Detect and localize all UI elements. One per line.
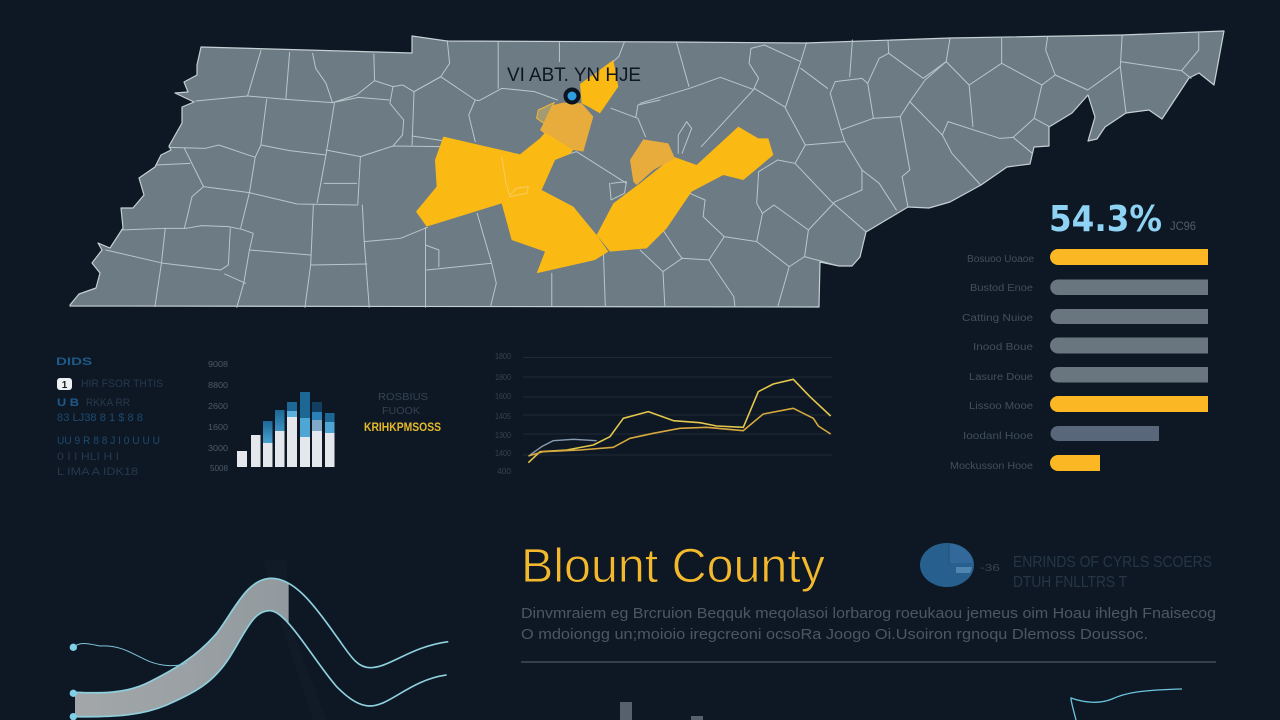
state outline xyxy=(70,31,1224,307)
legend line 2: U B xyxy=(57,397,79,409)
map pin xyxy=(564,88,580,104)
legend line 5: UU 9 R 8 8 J I 0 U U U xyxy=(57,435,160,447)
bar row 3 xyxy=(962,309,1208,324)
top fade over north tip xyxy=(578,60,600,78)
legend line 3: RKKA RR xyxy=(86,397,130,409)
y axis labels: 3000 xyxy=(208,444,229,453)
big stat: 54.3% xyxy=(1049,199,1162,240)
map: state with counties xyxy=(70,31,1224,307)
county: light amber east xyxy=(630,139,675,185)
heading: Blount County: Blount County xyxy=(521,540,825,593)
ribbon fill xyxy=(75,579,289,716)
map label: VI ABT. YN HJE xyxy=(507,65,641,86)
series grey xyxy=(530,439,597,455)
y axis labels xyxy=(495,351,511,476)
divider xyxy=(521,661,1216,663)
bar row 2: Bustod Enoe xyxy=(970,283,1033,294)
pie chart: -36 xyxy=(980,563,1001,574)
paragraph line 2: O mdoiongg un;moioio iregcreoni ocsoRa Joogo Oi.Usoiron rgnoqu Dlemoss Doussoc. xyxy=(521,626,1148,643)
y axis labels xyxy=(208,360,229,473)
lower curve xyxy=(75,611,447,717)
y axis labels: 5008 xyxy=(210,464,229,473)
bar row 7 xyxy=(963,426,1159,442)
pie caption xyxy=(1013,554,1212,591)
bottom right sparkline xyxy=(1071,689,1182,720)
stat unit: JC96 xyxy=(1170,219,1196,233)
caption line 1: ENRINDS OF CYRLS SCOERS xyxy=(1013,554,1212,571)
legend line 1: HIR FSOR THTIS xyxy=(81,378,163,390)
y axis labels: 9008 xyxy=(208,360,229,369)
bar row 5 xyxy=(969,367,1208,383)
legend badge: 1 xyxy=(62,380,68,391)
county boundary details xyxy=(502,157,528,197)
y axis labels: 1400 xyxy=(495,448,511,458)
county borders east xyxy=(640,33,1199,307)
highlighted counties xyxy=(416,60,773,273)
bar row 3: Catting Nuioe xyxy=(962,313,1034,324)
paragraph line 1: Dinvmraiem eg Brcruion Beqquk meqolasoi lorbarog roeukaou jemeus oim Hoau ihlegh Fnaisecog xyxy=(521,605,1216,622)
grid lines xyxy=(523,358,832,455)
bar row 4 xyxy=(973,338,1208,354)
y axis labels: 1405 xyxy=(495,411,511,421)
bar row 8: Mockusson Hooe xyxy=(950,461,1033,472)
legend line 4: 83 LJ38 8 1 $ 8 8 xyxy=(57,412,143,424)
bar row 1: Bosuoo Uoaoe xyxy=(967,254,1034,265)
bar row 6: Lissoo Mooe xyxy=(969,401,1033,412)
bar chart side note xyxy=(364,392,441,434)
bar row 8 xyxy=(950,455,1100,472)
bottom stub bars xyxy=(620,702,703,720)
pie chart xyxy=(920,543,1001,587)
series lower xyxy=(528,408,831,456)
legend heading: DIDS xyxy=(56,356,92,368)
bar row 2 xyxy=(970,280,1208,295)
legend line 6: 0 I I HLI H I xyxy=(57,451,119,463)
county: light amber north xyxy=(540,103,593,152)
bar row 4: Inood Boue xyxy=(973,342,1033,353)
y axis labels: 1300 xyxy=(495,430,511,440)
description paragraph xyxy=(521,605,1216,643)
y axis labels: 1800 xyxy=(495,351,511,361)
note line 2: FUOOK xyxy=(382,406,420,417)
note highlight: KRIHKPMSOSS xyxy=(364,420,441,434)
county group: east xyxy=(597,127,773,252)
y axis labels: 8800 xyxy=(208,381,229,390)
line chart xyxy=(495,351,832,476)
panel: left text legend xyxy=(56,356,163,478)
y axis labels: 1800 xyxy=(495,372,511,382)
legend line 7: L IMA A IDK18 xyxy=(57,466,138,478)
y axis labels: 2600 xyxy=(208,402,229,411)
bar row 1 xyxy=(967,249,1208,265)
county borders west xyxy=(106,41,660,307)
series upper xyxy=(528,379,831,463)
note line 1: ROSBIUS xyxy=(378,392,428,403)
upper curve xyxy=(75,578,448,693)
y axis labels: 1600 xyxy=(208,423,229,432)
y axis labels: 1600 xyxy=(495,391,511,401)
bar row 6 xyxy=(969,396,1208,412)
county: north tip xyxy=(580,60,618,113)
stacked bars xyxy=(237,392,334,467)
county group: central xyxy=(416,133,608,273)
ribbon chart xyxy=(70,578,448,720)
panel: percentage and horizontal bars xyxy=(950,199,1208,472)
bar row 5: Lasure Doue xyxy=(969,372,1033,383)
bar chart xyxy=(208,360,334,473)
bar row 7: Ioodanl Hooe xyxy=(963,431,1034,442)
caption line 2: DTUH FNLLTRS T xyxy=(1013,574,1127,591)
county: tan small xyxy=(537,103,554,123)
node dots xyxy=(70,644,77,720)
thin curve xyxy=(73,644,187,666)
ribbon shadow xyxy=(263,560,327,720)
y axis labels: 400 xyxy=(497,466,511,476)
